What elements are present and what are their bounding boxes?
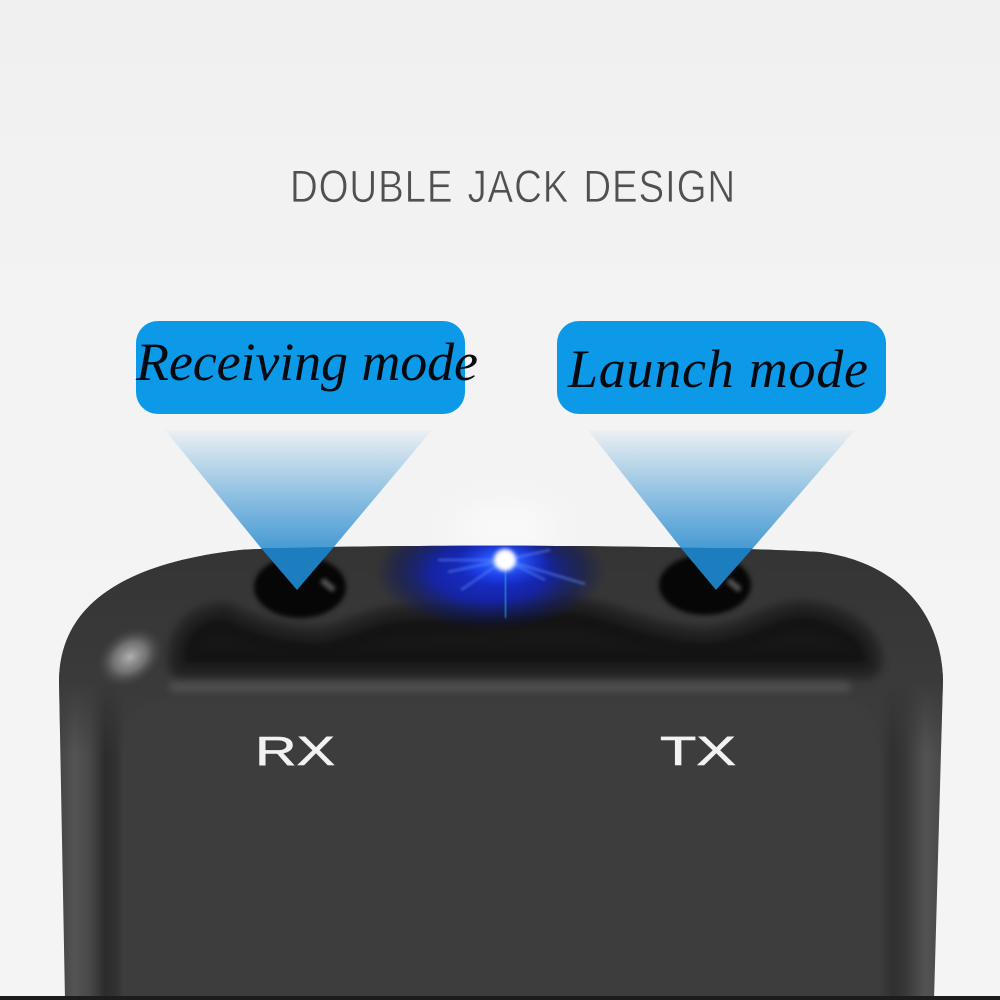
right beam <box>588 430 855 590</box>
callout: receiving mode <box>135 321 478 414</box>
left beam <box>165 430 432 590</box>
TX label: TX <box>660 728 736 774</box>
LED lower ray <box>505 560 506 618</box>
device body <box>50 514 950 1000</box>
device front face <box>123 699 879 1000</box>
top shoulder surface <box>59 546 943 742</box>
dark recessed band <box>185 614 865 662</box>
RX label: RX <box>255 728 335 774</box>
LED rays <box>438 550 585 590</box>
left jack glint <box>322 580 334 590</box>
LED blue glow <box>384 546 596 627</box>
right jack glint <box>728 580 740 590</box>
right jack <box>659 555 751 615</box>
device shell <box>50 540 950 1000</box>
left jack <box>254 556 346 618</box>
LED halo <box>460 546 548 584</box>
corner highlight <box>102 632 158 682</box>
title: DOUBLE JACK DESIGN <box>290 161 736 212</box>
callout: receiving mode: Receiving mode <box>135 332 478 392</box>
LED center <box>494 549 516 571</box>
callout: launch mode: Launch mode <box>567 339 868 399</box>
callout: launch mode <box>557 321 886 414</box>
light edge line <box>170 682 850 692</box>
white bloom above LED <box>455 504 555 552</box>
bottom edge line <box>0 996 1000 1000</box>
